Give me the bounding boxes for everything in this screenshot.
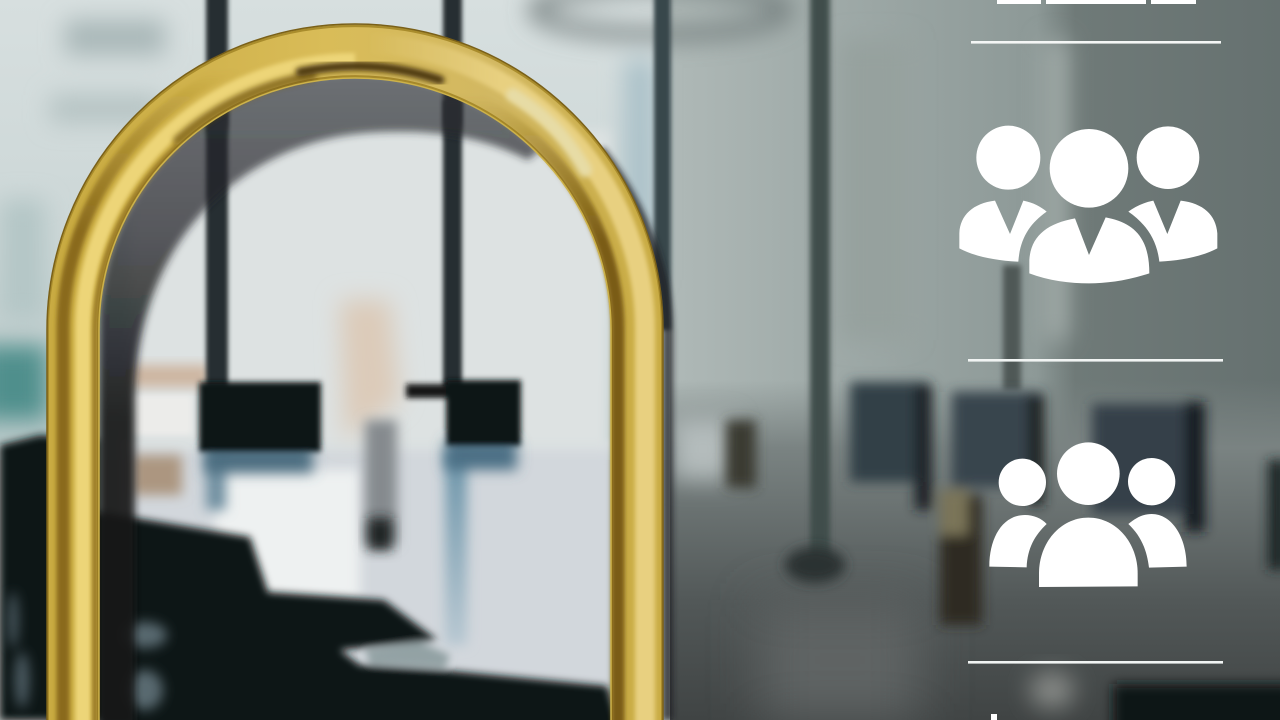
top inner dark bbox=[300, 66, 440, 80]
dark chairs in window bbox=[199, 380, 521, 473]
icon: group of people bbox=[989, 442, 1187, 587]
distant chairs and objects bbox=[726, 382, 1280, 720]
arch shadow bbox=[99, 72, 668, 720]
columns bbox=[810, 0, 1021, 560]
bottom icon fragment bbox=[991, 714, 997, 720]
window mullions bbox=[206, 0, 671, 390]
left bright stripe bbox=[83, 61, 355, 720]
left dark stripe bbox=[63, 41, 355, 720]
table surface bbox=[120, 440, 610, 690]
metallic body bbox=[73, 51, 637, 720]
inner left shade bbox=[95, 145, 178, 720]
icon: business team bbox=[959, 126, 1217, 283]
upper left inner shade bbox=[178, 76, 312, 140]
gold arch frame bbox=[47, 24, 663, 720]
top icon fragment bbox=[997, 0, 1196, 4]
hairline edges bbox=[99, 78, 611, 720]
foreground dark chair bbox=[0, 435, 620, 720]
divider top bbox=[971, 41, 1221, 44]
mullions over table bbox=[206, 100, 462, 390]
right bright stripe bbox=[355, 43, 645, 720]
upper right pale streak bbox=[513, 95, 585, 170]
floor bbox=[670, 380, 1280, 720]
divider middle bbox=[968, 359, 1223, 362]
divider bottom bbox=[968, 661, 1223, 664]
right dark stripe bbox=[355, 70, 618, 720]
